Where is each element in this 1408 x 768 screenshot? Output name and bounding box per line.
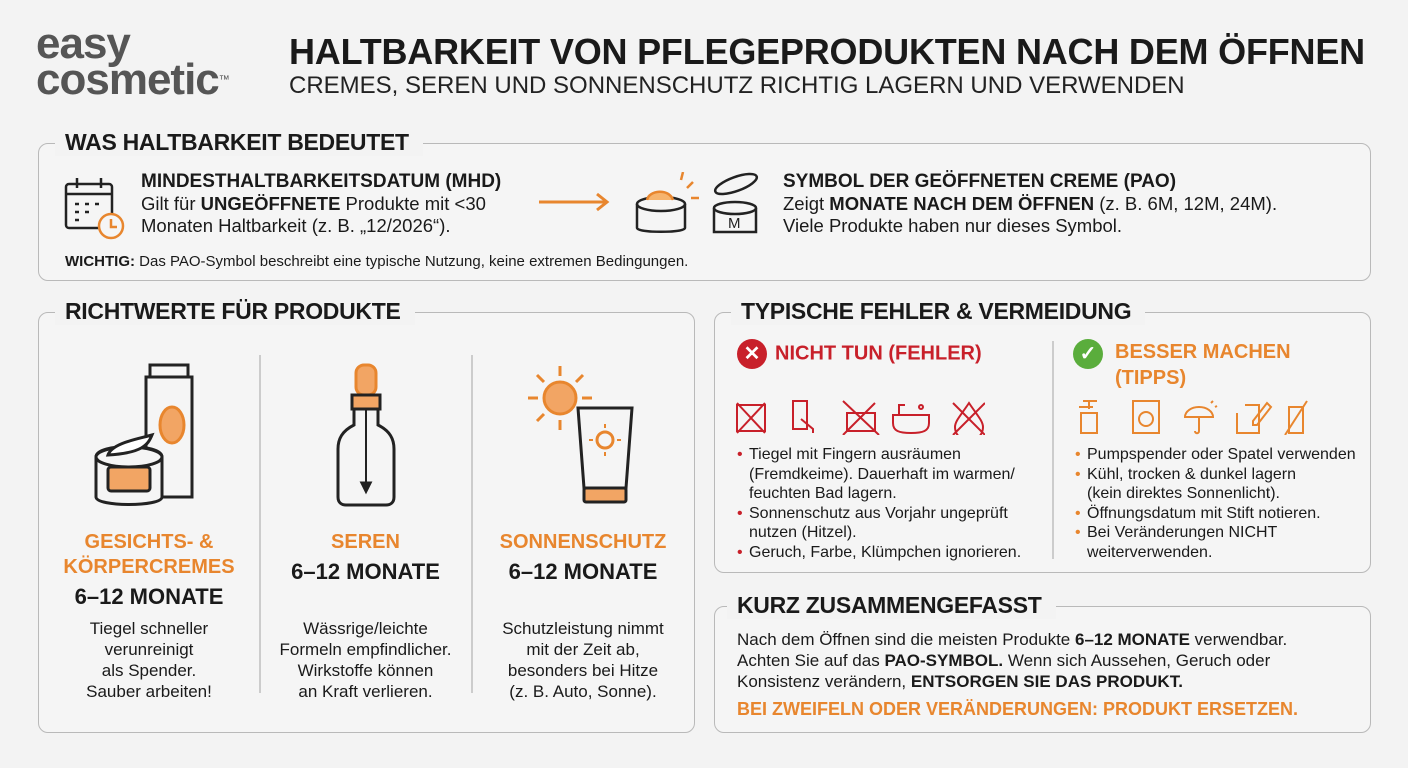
list: tipps: Bei Veränderungen NICHT weiterverwenden. [1087, 524, 1277, 560]
list: fehler: Sonnenschutz aus Vorjahr ungeprüft nutzen (Hitzel). [749, 504, 1008, 541]
summary text: Nach dem Öffnen sind die meisten Produkte 6–12 MONATE verwendbar. [737, 630, 1287, 649]
panel: typische fehler [714, 312, 1371, 573]
column: seren: an Kraft verlieren. [298, 682, 433, 701]
panel: was haltbarkeit bedeutet [38, 143, 1371, 281]
label [63, 531, 235, 578]
icon: PAO jars [636, 172, 758, 234]
summary text: Achten Sie auf das PAO-SYMBOL. Wenn sich Aussehen, Geruch oder [737, 651, 1270, 670]
list: tipps: Öffnungsdatum mit Stift notieren. [1087, 504, 1321, 522]
label: GESICHTS- & [85, 531, 213, 553]
column: sonnenschutz: mit der Zeit ab, [526, 640, 640, 659]
icon: calendar [64, 178, 124, 240]
column: sonnenschutz: Schutzleistung nimmt [502, 619, 664, 638]
MHD text [141, 171, 501, 236]
PAO text: Zeigt MONATE NACH DEM ÖFFNEN (z. B. 6M, 12M, 24M). [783, 193, 1277, 214]
column: seren: SEREN [331, 531, 400, 553]
MHD text: MINDESTHALTBARKEITSDATUM (MHD) [141, 171, 501, 192]
list: fehler: Tiegel mit Fingern ausräumen (Fremdkeime). Dauerhaft im warmen/ feuchten Bad lagern. [749, 446, 1015, 502]
title: HALTBARKEIT VON PFLEGEPRODUKTEN NACH DEM ÖFFNEN [289, 31, 1365, 72]
PAO text [783, 170, 1277, 236]
column: cremes: Tiegel schneller [90, 619, 208, 638]
list: tipps: Kühl, trocken & dunkel lagern [1087, 466, 1296, 482]
summary text [737, 630, 1287, 691]
MHD text: Gilt für UNGEÖFFNETE Produkte mit <30 [141, 193, 486, 214]
PAO text: SYMBOL DER GEÖFFNETEN CREME (PAO) [783, 171, 1176, 192]
subheading: besser machen [1073, 339, 1291, 389]
column: cremes: verunreinigt [105, 640, 193, 659]
icon: sun and tube [528, 366, 634, 504]
subheading: besser machen: BESSER MACHEN [1115, 341, 1291, 363]
list: tipps: (kein direktes Sonnenlicht). [1087, 485, 1280, 502]
heading: KURZ ZUSAMMENGEFASST [737, 592, 1042, 618]
column: sonnenschutz [500, 366, 666, 701]
column: cremes: 6–12 MONATE [75, 584, 223, 609]
subheading: nicht tun: NICHT TUN (FEHLER) [775, 342, 982, 364]
column: seren: Wässrige/leichte [303, 619, 428, 638]
icon: serum bottle [336, 364, 396, 506]
column: cremes [63, 364, 235, 701]
heading: WAS HALTBARKEIT BEDEUTET [65, 129, 409, 155]
icon: cream jar and tube [94, 364, 194, 506]
list: tipps [1076, 446, 1356, 560]
column: seren: Wirkstoffe können [298, 661, 433, 680]
column: seren: Formeln empfindlicher. [280, 640, 451, 659]
wichtig note: WICHTIG: Das PAO-Symbol beschreibt eine typische Nutzung, keine extremen Bedingungen. [65, 253, 688, 270]
icons: fehler [736, 400, 985, 435]
column: sonnenschutz: SONNENSCHUTZ [500, 531, 666, 553]
panel: richtwerte [38, 312, 695, 733]
arrow [539, 192, 610, 212]
column: cremes: als Spender. [102, 661, 196, 680]
panel: kurz zusammengefasst [714, 606, 1371, 733]
icons: tipps [1079, 400, 1308, 435]
PAO text: Viele Produkte haben nur dieses Symbol. [783, 215, 1122, 236]
logo: easy [36, 19, 130, 68]
column: sonnenschutz: besonders bei Hitze [508, 661, 658, 680]
logo: cosmetic™ [36, 55, 230, 104]
column: sonnenschutz: 6–12 MONATE [509, 559, 657, 584]
column: seren: 6–12 MONATE [291, 559, 440, 584]
callout: BEI ZWEIFELN ODER VERÄNDERUNGEN: PRODUKT ERSETZEN. [737, 699, 1298, 719]
column: sonnenschutz: (z. B. Auto, Sonne). [509, 682, 657, 701]
logo [36, 19, 230, 104]
icon: PAO jars: M [728, 215, 740, 232]
subheading: besser machen: ✓ [1080, 343, 1096, 365]
summary text: Konsistenz verändern, ENTSORGEN SIE DAS PRODUKT. [737, 672, 1183, 691]
label: KÖRPERCREMES [63, 556, 235, 578]
subheading: nicht tun [737, 339, 982, 369]
list: fehler [738, 446, 1021, 560]
heading: TYPISCHE FEHLER & VERMEIDUNG [741, 298, 1131, 324]
subtitle: CREMES, SEREN UND SONNENSCHUTZ RICHTIG LAGERN UND VERWENDEN [289, 72, 1185, 99]
list: fehler: Geruch, Farbe, Klümpchen ignorieren. [749, 544, 1021, 560]
subheading: besser machen: (TIPPS) [1115, 367, 1186, 389]
list: tipps: Pumpspender oder Spatel verwenden [1087, 446, 1356, 463]
column: seren [280, 364, 451, 701]
MHD text: Monaten Haltbarkeit (z. B. „12/2026“). [141, 215, 451, 236]
heading: RICHTWERTE FÜR PRODUKTE [65, 298, 401, 324]
subheading: nicht tun: ✕ [744, 343, 760, 365]
column: cremes: Sauber arbeiten! [86, 682, 212, 701]
